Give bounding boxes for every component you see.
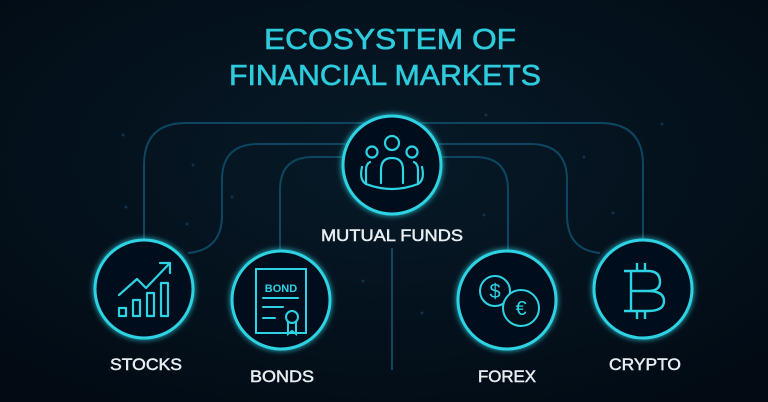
node: stocks: STOCKS: [110, 355, 182, 374]
node: stocks: [95, 240, 193, 374]
node: forex: $: [489, 281, 501, 303]
title: [229, 24, 541, 92]
node: bonds: [232, 251, 330, 386]
node: bonds: BOND: [265, 283, 297, 295]
title: FINANCIAL MARKETS: [229, 60, 541, 92]
title: ECOSYSTEM OF: [264, 24, 516, 56]
connector lines: [144, 123, 643, 370]
node: crypto: CRYPTO: [609, 355, 681, 374]
node: crypto: [594, 240, 692, 374]
node: bonds: BONDS: [250, 367, 314, 386]
node: forex: FOREX: [478, 367, 536, 386]
node: mutual funds: [321, 116, 463, 245]
node: forex: €: [515, 298, 527, 320]
node: mutual funds: MUTUAL FUNDS: [321, 226, 463, 245]
node: forex: [458, 251, 556, 386]
